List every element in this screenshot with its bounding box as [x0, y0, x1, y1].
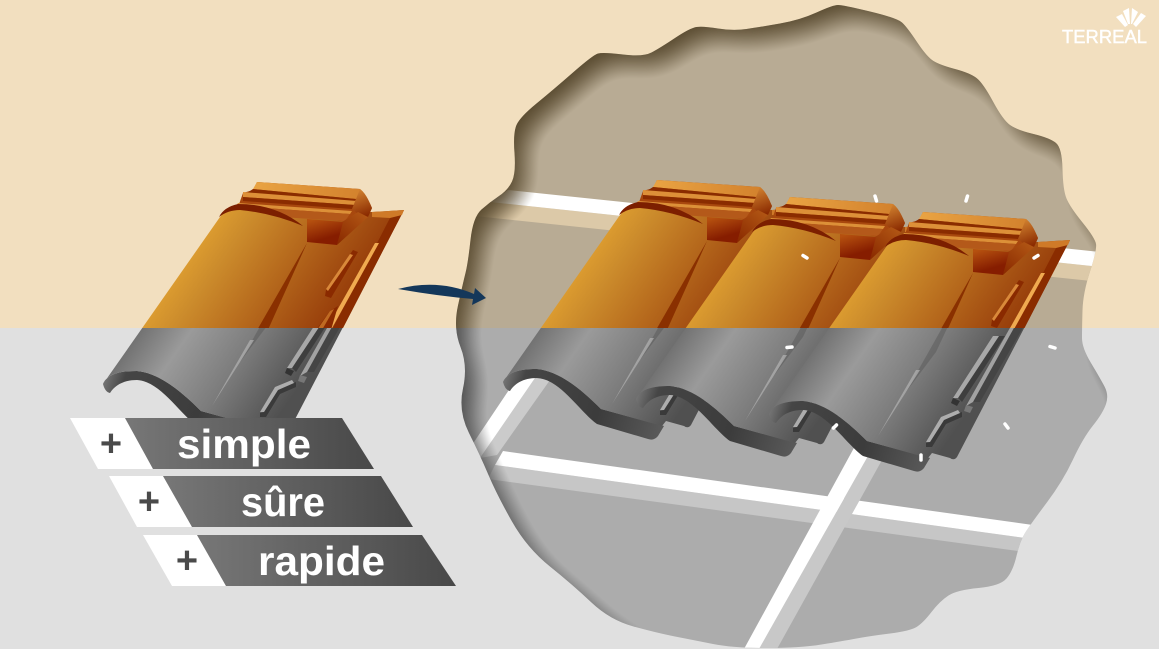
label: sûre	[109, 476, 413, 527]
assembled tile 1	[541, 180, 776, 328]
background: grey lower band	[0, 328, 1159, 649]
logo: Terreal	[1062, 8, 1147, 47]
lower batten	[488, 451, 1040, 554]
label: simple	[70, 418, 374, 469]
inner shadow of cut-out	[456, 5, 1107, 626]
roof cut-out, grey part	[456, 328, 1108, 648]
label: sûre: +	[138, 481, 160, 523]
upper batten	[475, 190, 1110, 283]
roof cut-out, colour part	[456, 5, 1096, 328]
single tile on the left	[142, 182, 404, 328]
label: sûre: sûre	[241, 479, 325, 525]
click sparks	[787, 196, 1055, 460]
label: rapide: +	[176, 540, 198, 582]
tiles, grey part	[103, 328, 1024, 472]
icon: logo fan	[1116, 8, 1146, 27]
label: simple: simple	[177, 421, 311, 467]
background: cream upper band	[0, 0, 1159, 328]
assembled tile 2	[686, 197, 908, 328]
label: rapide	[143, 535, 456, 586]
assembled tile 2, grey	[642, 328, 838, 457]
label: rapide: rapide	[258, 538, 385, 584]
assembled tile 1, grey	[503, 328, 704, 440]
single tile on the left, grey	[103, 328, 342, 418]
assembled tile 3	[829, 212, 1070, 328]
arrow	[398, 285, 486, 305]
assembled tile 3, grey	[775, 328, 1024, 472]
right rafter	[744, 446, 882, 649]
tiles, terracotta part	[142, 180, 1070, 328]
left rafter	[470, 378, 550, 458]
logo: Terreal: TERREAL	[1062, 27, 1147, 47]
label: simple: +	[100, 423, 122, 465]
